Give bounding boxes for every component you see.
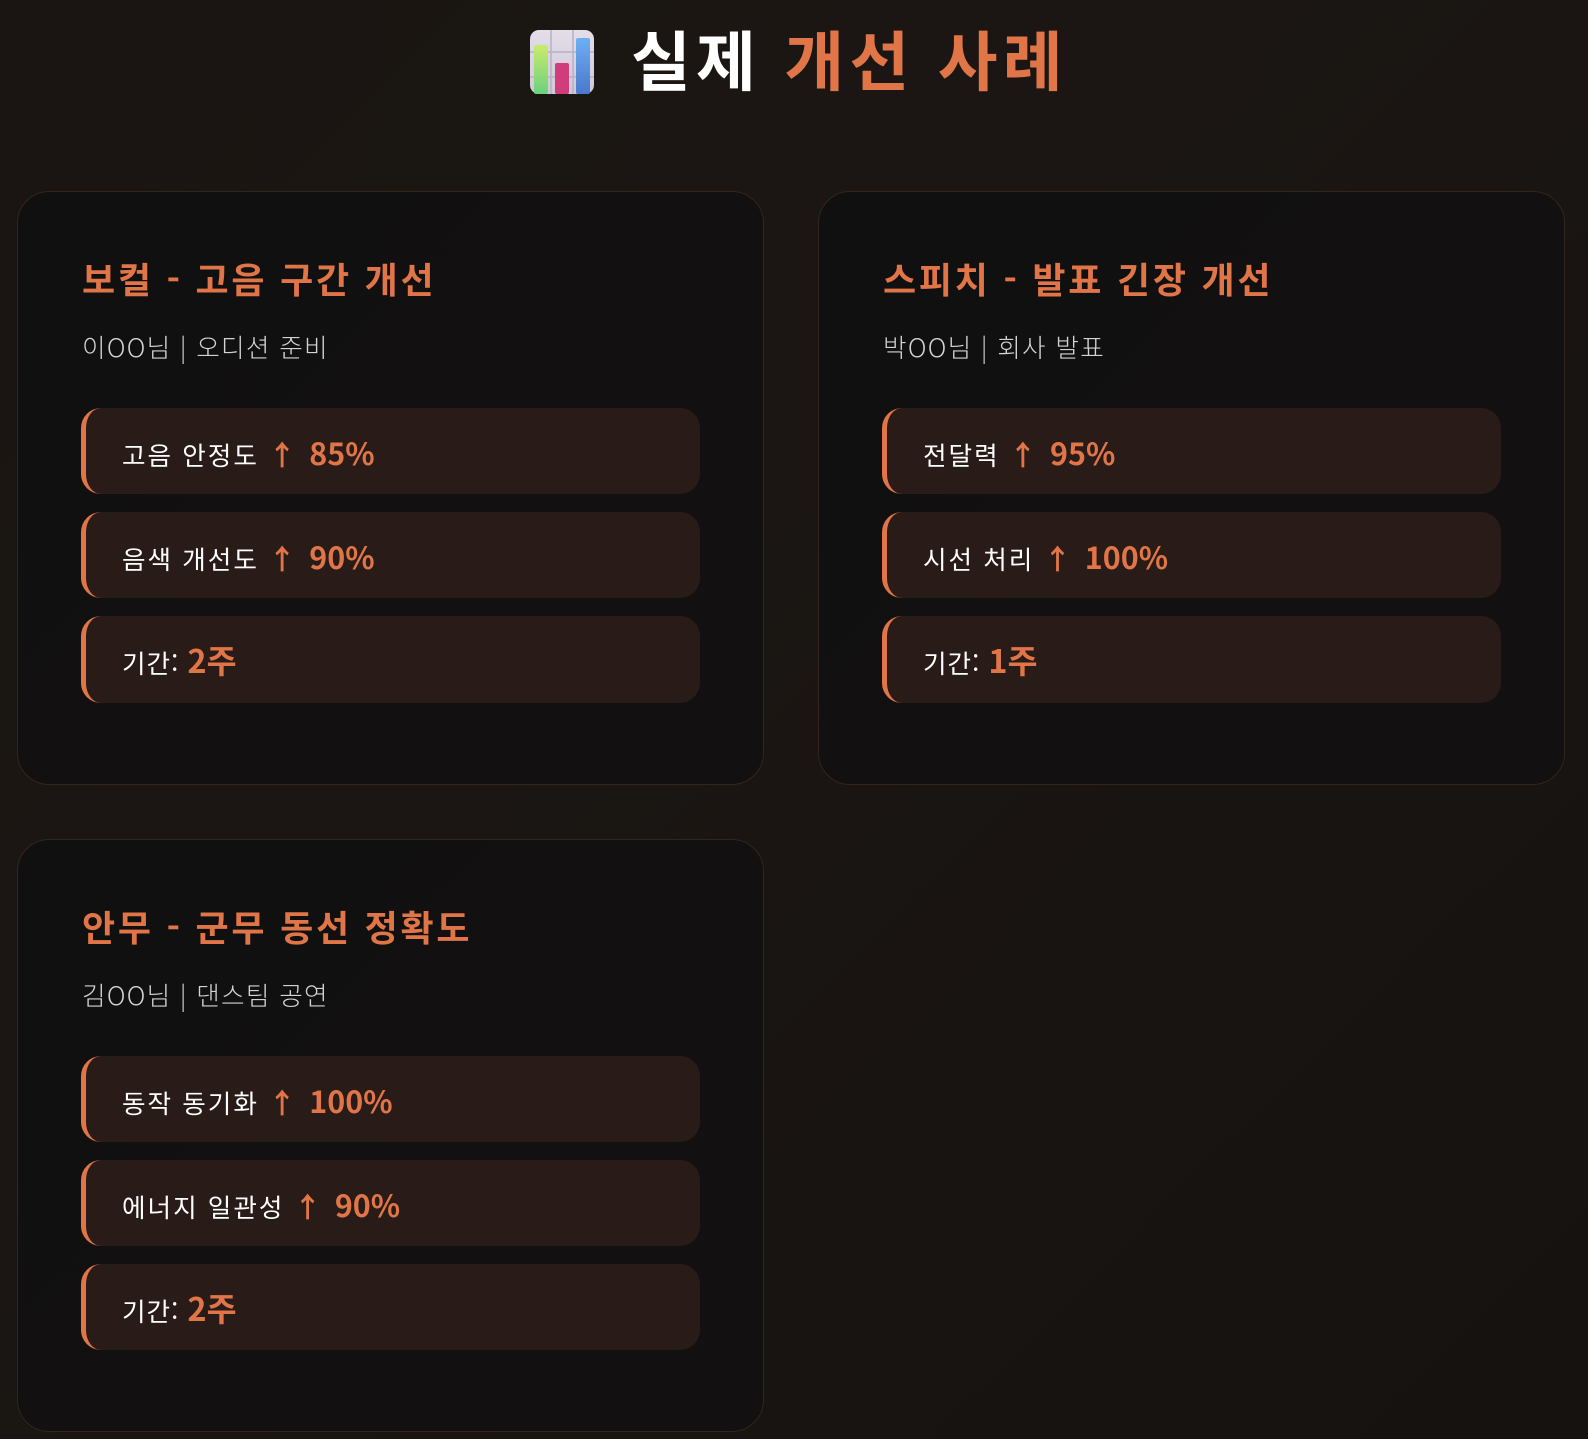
card heading: 스피치 - 발표 긴장 개선: [883, 252, 1273, 304]
title: [530, 30, 594, 94]
metric: duration: [81, 616, 700, 703]
panel: speech: [818, 191, 1565, 785]
metric: delivery: 전달력 ↑ 95%: [923, 430, 1115, 474]
card subtitle: 이OO님 | 오디션 준비: [82, 328, 329, 365]
card heading: 보컬 - 고음 구간 개선: [82, 252, 436, 304]
metric: energy: [81, 1160, 700, 1246]
metric: duration: 기간: 2주: [122, 636, 236, 683]
metric: sync: [81, 1056, 700, 1142]
heading text: 실제 개선 사례: [631, 10, 1068, 104]
card subtitle: 박OO님 | 회사 발표: [883, 328, 1105, 365]
card subtitle: 김OO님 | 댄스팀 공연: [82, 976, 329, 1013]
metric: eye contact: 시선 처리 ↑ 100%: [923, 534, 1168, 578]
panel: vocal: [17, 191, 764, 785]
metric: delivery: [882, 408, 1501, 494]
metric: tone improvement: [81, 512, 700, 598]
metric: duration: 기간: 2주: [122, 1284, 236, 1331]
metric: high note stability: [81, 408, 700, 494]
metric: eye contact: [882, 512, 1501, 598]
metric: duration: [81, 1264, 700, 1350]
metric: energy: 에너지 일관성 ↑ 90%: [122, 1182, 400, 1226]
metric: high note stability: 고음 안정도 ↑ 85%: [122, 430, 375, 474]
icon: bar chart: [530, 30, 594, 94]
card heading: 안무 - 군무 동선 정확도: [82, 900, 472, 952]
metric: duration: 기간: 1주: [923, 636, 1037, 683]
panel: dance: [17, 839, 764, 1432]
metric: tone improvement: 음색 개선도 ↑ 90%: [122, 534, 375, 578]
metric: sync: 동작 동기화 ↑ 100%: [122, 1078, 393, 1122]
metric: duration: [882, 616, 1501, 703]
